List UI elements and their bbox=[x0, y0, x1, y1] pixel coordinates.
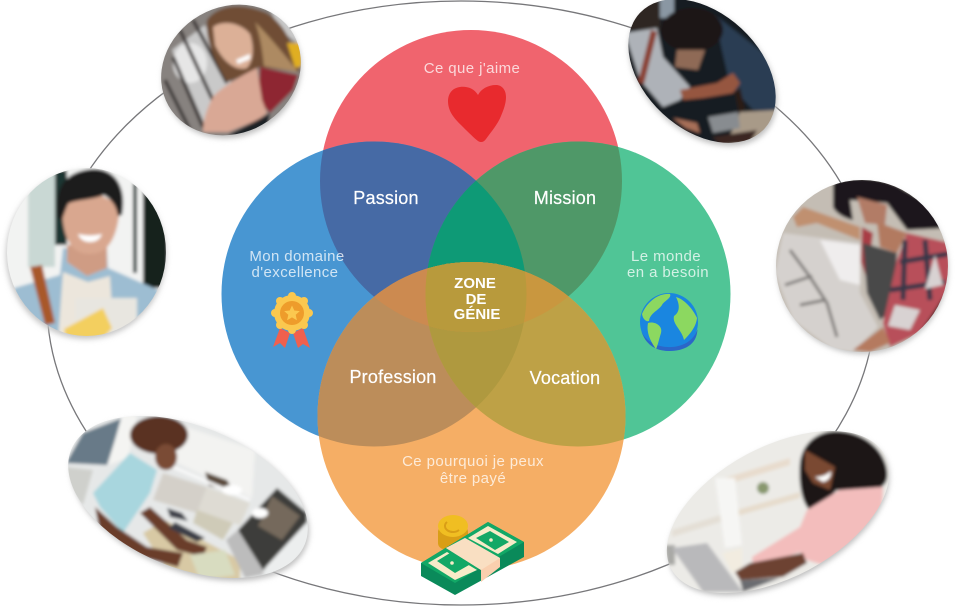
circle: Ce pourquoi je peux être payé bbox=[318, 262, 626, 570]
photo: woman with blueprint bbox=[770, 175, 955, 360]
circle: Mon domaine d'excellence bbox=[222, 142, 526, 446]
photo: woman on laptop bbox=[666, 430, 892, 598]
overlap: orange blue green bbox=[429, 262, 524, 407]
label: Passion: Passion bbox=[353, 188, 419, 208]
overlap: orange and red bbox=[374, 262, 568, 296]
overlap: centre genius zone bbox=[426, 262, 526, 332]
label: Le monde en a besoin: en a besoin bbox=[627, 264, 709, 281]
circle: Ce que j'aime bbox=[320, 30, 622, 332]
label: Zone de génie: GÉNIE bbox=[454, 306, 500, 323]
overlap: orange red blue bbox=[374, 262, 524, 326]
photo: student with notebooks bbox=[0, 160, 170, 345]
overlap: Mission bbox=[428, 142, 622, 296]
icon: heart bbox=[448, 85, 506, 142]
label: Ce pourquoi je peux être payé: Ce pourquoi je peux bbox=[402, 453, 544, 470]
overlap: blue and green bbox=[428, 180, 525, 272]
overlap: Profession bbox=[318, 262, 524, 446]
label: Vocation: Vocation bbox=[530, 368, 600, 388]
photo: woman looking at watch bbox=[160, 4, 304, 142]
photo: designer at desk bbox=[68, 416, 312, 584]
label: Zone de génie: ZONE bbox=[454, 275, 496, 292]
label: Profession: Profession bbox=[349, 367, 437, 387]
photo: chef plating bbox=[626, 0, 780, 149]
icon: money bbox=[421, 515, 524, 595]
label: Ce que j'aime: Ce que j'aime bbox=[424, 60, 520, 77]
label: Zone de génie bbox=[454, 275, 500, 323]
label: Mon domaine d'excellence: d'excellence bbox=[252, 264, 338, 281]
label: Ce pourquoi je peux être payé bbox=[402, 453, 544, 487]
circle: Le monde en a besoin bbox=[426, 142, 730, 446]
overlap: Passion bbox=[320, 142, 476, 296]
label: Mon domaine d'excellence: Mon domaine bbox=[249, 248, 345, 265]
label: Le monde en a besoin bbox=[627, 248, 709, 281]
label: Zone de génie: DE bbox=[466, 291, 486, 308]
label: Le monde en a besoin: Le monde bbox=[631, 248, 701, 265]
icon: medal bbox=[271, 292, 313, 348]
label: Ce pourquoi je peux être payé: être payé bbox=[440, 470, 506, 487]
overlap: Vocation bbox=[431, 262, 626, 446]
overlap: orange red green bbox=[431, 262, 568, 322]
icon: globe bbox=[640, 293, 698, 351]
venn diagram bbox=[222, 30, 730, 566]
label: Mission: Mission bbox=[534, 188, 596, 208]
label: Mon domaine d'excellence bbox=[249, 248, 345, 281]
